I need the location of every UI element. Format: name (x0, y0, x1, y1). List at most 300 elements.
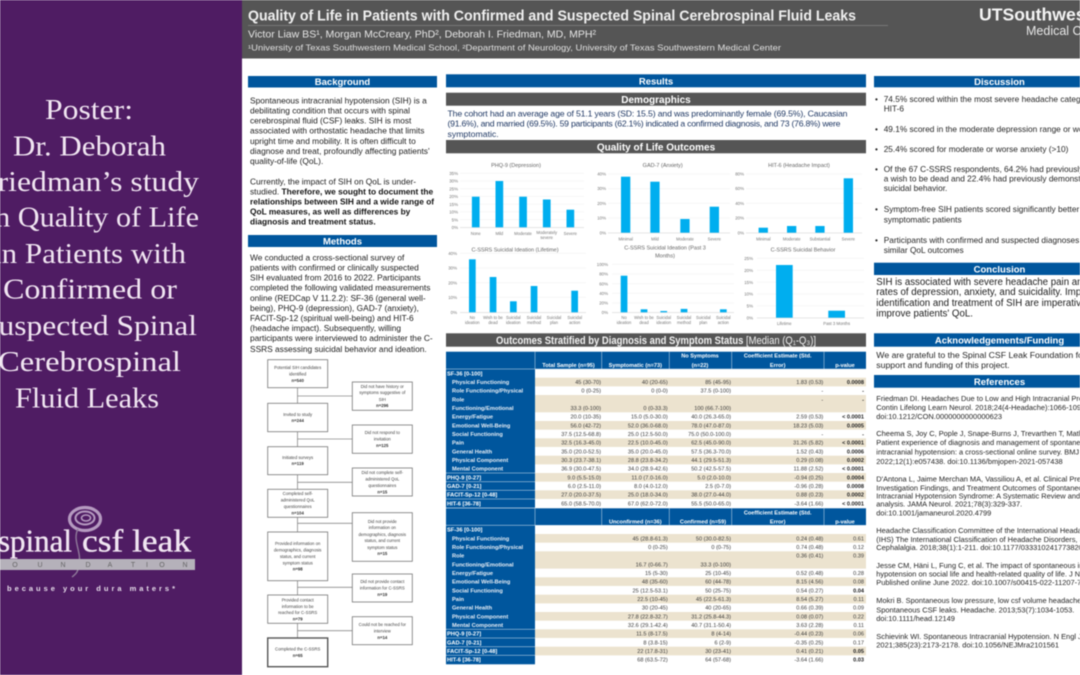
table: diagnosis status: 0.05 (853, 649, 864, 655)
table: symptom status: 0 (0-33.3) (643, 406, 668, 412)
flowchart: Invited to study (283, 412, 313, 417)
text: background paragraph (250, 96, 434, 226)
chart: PHQ-9 depression: 35% (449, 171, 458, 176)
chart: HIT-6 headache impact: 40% (735, 201, 744, 206)
table: symptom status: 31.26 (5.82) (793, 441, 823, 447)
table: diagnosis status: 6 (2-9) (715, 640, 731, 646)
logo: spinal csf leak foundation: spinal (0, 523, 72, 559)
logo: spinal csf leak foundation: I (146, 562, 148, 569)
text: acknowledgement (876, 350, 1080, 370)
panel: results heading: Results (639, 76, 673, 87)
authors: Victor Liaw BS¹, Morgan McCreary, PhD², Deborah I. Friedman, MD, MPH² (248, 30, 597, 40)
table: symptom status: 35.0 (20.0-52.5) (561, 449, 601, 455)
table: diagnosis status: 22.5 (10-45) (637, 597, 668, 603)
table: diagnosis status: PHQ-9 [0-27] (447, 632, 481, 638)
table: symptom status: GAD-7 [0-21] (447, 484, 482, 490)
table: diagnosis status: 11.5 (8-17.5) (636, 632, 668, 638)
text: discussion bullets: 25.4% scored for moderate or worse anxiety (>10) (884, 144, 1069, 154)
text: background paragraph: diagnose and treat, profoundly affecting patients' (250, 146, 430, 156)
chart: PHQ-9 depression: severe (540, 235, 554, 240)
panel: outcomes table heading: Outcomes Stratified by Diagnosis and Symptom Status [Median (Q₁-Q₃)] (496, 335, 816, 347)
chart: C-SSRS ideation past 3 months: 0% (602, 310, 608, 315)
flowchart: Provided information on (275, 541, 321, 546)
chart: C-SSRS ideation past 3 months: Suicidal (716, 315, 731, 320)
chart: C-SSRS ideation lifetime: C-SSRS Suicidal Ideation (Lifetime) (471, 248, 559, 254)
table: diagnosis status: Physical Functioning (452, 536, 510, 542)
text: methods paragraph: We conducted a cross-sectional survey of (250, 252, 405, 262)
logo: spinal csf leak foundation: O (159, 562, 165, 569)
text: reference list: 2021;385(23):2173-2178. doi:10.1056/NEJMra2101561 (876, 640, 1059, 650)
flowchart: symptoms suggestive of (359, 390, 406, 395)
panel: quality of life outcomes: Quality of Life Outcomes (597, 142, 716, 154)
chart: PHQ-9 depression: PHQ-9 (Depression) (491, 163, 541, 169)
header band (242, 0, 1080, 58)
panel: references: References (974, 377, 1025, 388)
logo: spinal csf leak foundation: N (60, 562, 66, 569)
flowchart: symptom status (367, 545, 397, 550)
table: diagnosis status: 0.03 (853, 658, 864, 664)
text: demographics paragraph: (91.6%), and married (69.5%). 59 participants (62.1%) indicated a confirmed diagnosis, and 73 (76.8%) were (448, 118, 841, 128)
table: diagnosis status: 15 (5-30) (645, 571, 668, 577)
table: symptom status: 57.5 (36.3-70.0) (691, 449, 731, 455)
table: diagnosis status: 0.28 (853, 571, 864, 577)
flowchart (268, 360, 412, 667)
table: symptom status: - (862, 432, 864, 438)
table: symptom status: 8.0 (4.0-12.0) (634, 484, 668, 490)
table: symptom status: 32.5 (16.3-45.0) (561, 441, 601, 447)
table: symptom status: 35.0 (20.0-45.0) (628, 449, 668, 455)
chart: C-SSRS suicidal behavior: 0% (747, 315, 753, 320)
table: symptom status: 0.0006 (847, 449, 864, 455)
table: diagnosis status: 0.52 (0.48) (796, 571, 823, 577)
icon: spiral (70, 508, 100, 577)
flowchart: administered QoL (281, 498, 315, 502)
table: symptom status: Physical Component (452, 458, 508, 464)
table: diagnosis status: -0.44 (0.23) (794, 632, 823, 638)
table: diagnosis status: 0.61 (853, 536, 864, 542)
chart: C-SSRS ideation lifetime: action (569, 320, 581, 325)
text: discussion bullets: • (875, 124, 878, 134)
table: symptom status: 38.0 (27.0-44.0) (691, 493, 731, 499)
table: symptom status: 0.0008 (847, 380, 864, 386)
text: reference list: doi:10.1111/head.12149 (876, 614, 955, 623)
table: diagnosis status: 0.39 (853, 554, 864, 560)
flowchart: n=98 (293, 566, 303, 572)
chart: C-SSRS suicidal behavior: Past 3 Months (823, 321, 850, 326)
table: diagnosis status: 0.04 (853, 588, 865, 594)
chart: GAD-7 anxiety: 40% (597, 172, 606, 177)
table: diagnosis status: 0.54 (0.27) (796, 588, 823, 594)
table: symptom status: 0.0005 (847, 423, 864, 429)
table: diagnosis status: Role (452, 554, 464, 560)
table: symptom status: 50.2 (42.5-57.5) (691, 467, 731, 473)
table: symptom status: 30.3 (23.7-38.1) (561, 458, 601, 464)
table: symptom status: Mental Component (452, 467, 503, 473)
flowchart: Did not complete self- (362, 470, 404, 475)
table: symptom status: 37.5 (0-100) (701, 389, 731, 395)
table: symptom status: 78.0 (47.0-87.0) (691, 423, 731, 429)
text: conclusion paragraph (876, 277, 1080, 320)
text: discussion bullets: symptomatic patients (884, 214, 962, 224)
table: diagnosis status: GAD-7 [0-21] (447, 640, 482, 646)
chart: C-SSRS ideation past 3 months: Months) (655, 254, 675, 260)
flowchart: n=65 (293, 653, 303, 658)
chart: PHQ-9 depression: 15% (449, 202, 458, 207)
flowchart: demographics, diagnosis (274, 548, 321, 552)
flowchart: n=15 (377, 551, 388, 556)
chart: C-SSRS ideation lifetime: 30% (448, 266, 457, 271)
table: diagnosis status: Social Functioning (452, 588, 503, 594)
panel: purple sidebar (0, 0, 242, 675)
text: methods paragraph: SSRS assessing suicidal behavior and ideation. (250, 344, 427, 354)
text: discussion bullets: HIT-6 (884, 104, 904, 114)
chart: C-SSRS suicidal behavior: C-SSRS Suicidal Behavior (771, 248, 836, 254)
heading: poster description: Fluid Leaks (15, 384, 159, 414)
chart: GAD-7 anxiety: 30% (597, 186, 606, 191)
text: methods paragraph: participants were interviewed to administer the C- (250, 333, 433, 343)
text: reference list: doi:10.1212/CON.0000000000000623 (876, 412, 1002, 421)
flowchart: n=19 (377, 592, 388, 597)
panel: results heading (446, 74, 866, 87)
chart: HIT-6 headache impact: 60% (735, 186, 744, 191)
table: diagnosis status: 0.66 (0.39) (796, 606, 823, 612)
text: reference list: Published online June 2022. doi:10.1007/s00415-022-11207-7 (876, 578, 1080, 587)
text: discussion bullets: • (875, 164, 878, 174)
chart: PHQ-9 depression: 30% (449, 179, 458, 184)
table: symptom status: 85 (45-95) (705, 380, 731, 386)
chart: HIT-6 headache impact: 20% (735, 215, 744, 220)
table: diagnosis status: 8.54 (5.27) (796, 597, 823, 603)
table: diagnosis status: 33.3 (0-100) (701, 562, 731, 568)
table: diagnosis status: 0.74 (0.48) (796, 545, 823, 551)
table: diagnosis status: General Health (452, 606, 493, 612)
table: symptom status: Coefficient Estimate (Std. (744, 354, 812, 360)
table: symptom status: Symptomatic (n=73) (609, 363, 662, 369)
flowchart: n=125 (376, 443, 389, 448)
table: diagnosis status: 45 (22.5-61.3) (696, 597, 731, 603)
table: diagnosis status: 27.8 (22.8-32.7) (628, 614, 668, 620)
chart: GAD-7 anxiety: 10% (597, 215, 606, 220)
table: symptom status: 40 (20-65) (642, 380, 668, 386)
table: diagnosis status: FACIT-Sp-12 [0-48] (447, 649, 497, 655)
chart: C-SSRS ideation past 3 months: 20% (599, 301, 608, 306)
text: demographics paragraph (448, 108, 848, 139)
table: diagnosis status: 0.24 (0.48) (796, 536, 823, 542)
text: acknowledgement: support and funding of this project. (876, 360, 1010, 370)
table: diagnosis status: 0.22 (853, 614, 864, 620)
table: symptom status: Pain (452, 441, 465, 447)
table: symptom status: 34.0 (28.9-42.6) (628, 467, 668, 473)
flowchart: demographics, diagnosis (359, 532, 406, 537)
heading: poster description (0, 95, 199, 414)
text: discussion bullets: suicidal behavior. (884, 183, 947, 193)
table: symptom status: 36.9 (30.0-47.5) (561, 467, 601, 473)
heading: poster description: Dr. Deborah (13, 132, 166, 162)
table: symptom status: 1.52 (0.43) (796, 449, 823, 455)
text: reference list: 2022;12(1):e057438. doi:10.1136/bmjopen-2021-057438 (876, 457, 1063, 466)
text: background paragraph: associated with orthostatic headache that limits (250, 126, 424, 136)
table: symptom status: Role Functioning/Physical (452, 389, 524, 395)
table: diagnosis status: 32.6 (29.1-42.4) (628, 623, 668, 629)
table: symptom status: < 0.0001 (842, 501, 864, 507)
chart: PHQ-9 depression: Mild (495, 231, 504, 236)
flowchart: Provided contact (282, 598, 315, 602)
table: diagnosis status: 0.17 (853, 640, 864, 646)
chart: PHQ-9 depression: 10% (449, 210, 458, 215)
chart: C-SSRS ideation past 3 months: action (718, 320, 730, 325)
flowchart: Did not provide contact (360, 579, 405, 584)
table: symptom status: 0 (0-25) (581, 389, 601, 395)
flowchart: n=79 (293, 616, 303, 622)
table: symptom status: 25.0 (12.5-50.0) (628, 432, 668, 438)
table: diagnosis status: -0.35 (0.25) (794, 640, 823, 646)
table: diagnosis status: SF-36 [0-100] (447, 528, 483, 534)
table: diagnosis status: 25 (12.5-53.1) (633, 588, 668, 594)
flowchart: information for C-SSRS (360, 586, 405, 590)
chart: C-SSRS suicidal behavior: 10% (744, 292, 753, 297)
table: symptom status: - (821, 397, 823, 403)
table: diagnosis status: 31.2 (25.8-44.3) (691, 614, 731, 620)
text: demographics paragraph: symptomatic. (448, 129, 499, 139)
flowchart: symptom status (283, 560, 313, 566)
chart: C-SSRS ideation lifetime: Suicidal (527, 315, 541, 320)
flowchart: n=119 (292, 461, 304, 466)
table: symptom status: 0.0008 (847, 484, 864, 490)
text: conclusion paragraph: improve patients' QoL. (876, 308, 973, 320)
table: symptom status: 67.0 (62.0-72.0) (628, 501, 668, 507)
flowchart: information on (369, 525, 397, 530)
chart: C-SSRS ideation past 3 months: C-SSRS Suicidal Ideation (Past 3 (624, 245, 706, 251)
table: diagnosis status: 0 (0-25) (648, 545, 668, 551)
flowchart: Initiated surveys (282, 455, 313, 460)
chart: C-SSRS ideation lifetime: Suicidal (547, 315, 561, 320)
text: demographics paragraph: The cohort had an average age of 51.1 years (SD: 15.5) and was predominantly female (69.5%), Caucasian (448, 108, 848, 118)
chart: C-SSRS ideation past 3 months (597, 245, 734, 325)
chart: GAD-7 anxiety: Moderate (676, 236, 695, 242)
text: reference list: analysis. JAMA Neurol. 2021;78(3):329-337. (876, 500, 1022, 508)
panel: references (874, 375, 1080, 650)
chart: HIT-6 headache impact: Substantial (810, 236, 830, 242)
chart: HIT-6 headache impact: 80% (735, 172, 744, 177)
text: background paragraph: quality-of-life (QoL). (250, 156, 323, 166)
flowchart: questionnaires (284, 504, 312, 509)
table: symptom status: -3.64 (1.66) (794, 501, 823, 507)
panel: acknowledgements: Acknowledgements/Funding (935, 336, 1064, 346)
flowchart: Completed self- (283, 491, 313, 496)
chart: C-SSRS ideation past 3 months: Wish to be (634, 315, 655, 320)
table: diagnosis status: Mental Component (452, 623, 503, 629)
table: diagnosis status: Functioning/Emotional (452, 562, 514, 568)
flowchart: n=15 (377, 490, 388, 494)
table: diagnosis status: 40.7 (31.1-50.4) (691, 623, 731, 629)
table: symptom status: - (821, 432, 823, 438)
text: methods paragraph: patients with confirmed or clinically suspected (250, 262, 419, 272)
chart: C-SSRS ideation lifetime: Suicidal (506, 315, 521, 320)
logo: spinal csf leak foundation: O (12, 562, 18, 569)
table: symptom status: Emotional Well-Being (452, 423, 511, 429)
flowchart: SIH (379, 397, 386, 402)
chart: C-SSRS suicidal behavior (744, 248, 864, 326)
chart: C-SSRS ideation lifetime: 0% (451, 310, 457, 315)
chart: C-SSRS suicidal behavior: Lifetime (777, 321, 792, 326)
chart: HIT-6 headache impact: HIT-6 (Headache Impact) (768, 163, 830, 169)
table: diagnosis status: 45 (28.8-61.3) (633, 536, 668, 542)
logo: spinal csf leak foundation: D (85, 562, 91, 569)
affiliations: ¹University of Texas Southwestern Medical School, ²Department of Neurology, University of Texas Southwestern Medical Center (248, 42, 781, 52)
chart: C-SSRS ideation past 3 months: 80% (599, 272, 608, 277)
table: symptom status: < 0.0001 (842, 467, 864, 473)
heading: poster description: Cerebrospinal (0, 347, 181, 378)
table: diagnosis status: Role Functioning/Physical (452, 545, 524, 551)
flowchart: Did not have history or (361, 384, 404, 389)
table: diagnosis status: 0.12 (853, 545, 864, 551)
table: diagnosis status: 0.41 (0.21) (796, 649, 823, 655)
table: symptom status: - (862, 397, 864, 403)
table: symptom status: 0.0002 (847, 458, 864, 464)
table: symptom status: 20.0 (10-35) (571, 415, 601, 421)
table: symptom status: FACIT-Sp-12 [0-48] (447, 493, 497, 499)
table: symptom status: 6.0 (2.5-11.0) (568, 484, 601, 490)
chart: PHQ-9 depression (449, 163, 584, 240)
text: reference list: doi:10.1001/jamaneurol.2020.4799 (876, 508, 991, 518)
table: diagnosis status: p-value (835, 520, 855, 526)
flowchart: administered QoL (365, 476, 400, 482)
table: diagnosis status: Confirmed (n=59) (680, 520, 726, 526)
text: background paragraph: diagnosis and treatment status. (250, 216, 376, 226)
table: symptom status: 100 (66.7-100) (694, 406, 731, 412)
table: symptom status: 0.88 (0.23) (796, 493, 823, 499)
table: diagnosis status: 8 (4-14) (711, 632, 731, 638)
table: symptom status: - (821, 389, 823, 395)
chart: C-SSRS ideation lifetime: 40% (448, 251, 457, 256)
chart: GAD-7 anxiety: Minimal (618, 236, 633, 242)
table: symptom status: 44.1 (29.5-51.3) (691, 458, 731, 464)
chart: PHQ-9 depression: Severe (564, 231, 578, 236)
text: reference list: Spontaneous CSF leaks. Headache. 2013;53(7):1034-1053. (876, 606, 1074, 614)
chart: PHQ-9 depression: 0% (452, 225, 458, 230)
chart: GAD-7 anxiety: 0% (600, 230, 606, 235)
text: background paragraph: debilitating condition that occurs with spinal (250, 106, 410, 116)
chart: C-SSRS ideation past 3 months: dead (639, 320, 649, 325)
chart: GAD-7 anxiety: 20% (597, 201, 606, 206)
flowchart: n=14 (377, 635, 388, 640)
flowchart: n=540 (292, 378, 304, 383)
table: symptom status: 75.0 (50.0-100.0) (688, 432, 731, 438)
chart: HIT-6 headache impact (735, 163, 862, 242)
chart: PHQ-9 depression: 25% (449, 186, 458, 191)
table: symptom status: Functioning/Emotional (452, 406, 514, 412)
title: Quality of Life in Patients with Confirmed and Suspected Spinal Cerebrospinal Fluid Leaks (248, 8, 856, 24)
panel: methods: Methods (323, 236, 362, 248)
table: symptom status: 9.0 (5.5-15.0) (567, 475, 601, 481)
table: symptom status: 37.5 (12.5-68.8) (561, 432, 601, 438)
table: diagnosis status: HIT-6 [36-78] (447, 658, 481, 664)
table: diagnosis status: 30 (23-41) (705, 649, 731, 655)
table: diagnosis status: Emotional Well-Being (452, 580, 511, 586)
table: diagnosis status: 50 (25-75) (705, 588, 731, 594)
table: symptom status: 22.5 (10.0-45.0) (628, 441, 668, 447)
table: symptom status: 56.0 (42-72) (571, 423, 601, 429)
table: symptom status: p-value (835, 363, 855, 369)
table: diagnosis status: 25 (10-45) (705, 571, 731, 577)
chart: C-SSRS ideation lifetime: dead (488, 320, 498, 325)
panel: conclusion: Conclusion (974, 264, 1026, 276)
chart: C-SSRS ideation past 3 months: method (677, 320, 692, 325)
flowchart: information to be (282, 604, 314, 609)
table: diagnosis status: 8.15 (4.56) (796, 580, 823, 586)
chart: C-SSRS ideation lifetime: method (527, 320, 542, 325)
table: symptom status: 52.0 (36.0-68.0) (628, 423, 668, 429)
text: discussion bullets: • (875, 204, 878, 214)
table: symptom status: < 0.0001 (842, 415, 864, 421)
table: symptom status: 11.88 (2.52) (794, 467, 823, 473)
logo: spinal csf leak foundation: N (182, 562, 188, 569)
table: diagnosis status: 0.08 (0.07) (796, 614, 823, 620)
table: symptom status: Total Sample (n=95) (542, 363, 595, 369)
table: symptom status: 1.83 (0.53) (796, 380, 823, 386)
table: symptom status: 15.0 (5.0-30.0) (631, 415, 668, 421)
chart: C-SSRS suicidal behavior: 20% (744, 268, 753, 273)
table: symptom status: 5.0 (2.0-10.0) (697, 475, 731, 481)
panel: discussion: Discussion (974, 77, 1025, 88)
text: methods paragraph: (headache impact). Subsequently, willing (250, 323, 401, 333)
table: symptom status: - (862, 389, 864, 395)
table: diagnosis status: 48 (35-60) (642, 580, 668, 586)
logo: spinal csf leak foundation: A (108, 562, 113, 569)
chart: C-SSRS ideation lifetime: plan (550, 320, 559, 325)
table: diagnosis status (446, 508, 866, 664)
table: diagnosis status: 0.09 (853, 606, 864, 612)
table: symptom status (446, 352, 866, 508)
table: symptom status: 33.3 (0-100) (571, 406, 601, 412)
flowchart: invitation (374, 436, 391, 442)
table: symptom status: Role (452, 397, 464, 403)
flowchart: interview (374, 628, 392, 634)
chart: C-SSRS ideation lifetime: 10% (448, 295, 457, 300)
table: symptom status: 45 (30-70) (575, 380, 601, 386)
text: methods paragraph: completed the following validated measurements (250, 282, 430, 292)
table: diagnosis status: Energy/Fatigue (452, 571, 493, 577)
table: symptom status: 2.59 (0.53) (796, 415, 823, 421)
table: symptom status: No Symptoms (681, 354, 719, 360)
chart: C-SSRS ideation lifetime: Wish to be (483, 315, 504, 320)
heading: poster description: Confirmed or (3, 274, 178, 306)
table: symptom status: Social Functioning (452, 432, 503, 438)
chart: C-SSRS suicidal behavior: 15% (744, 280, 753, 285)
table: symptom status: HIT-6 [36-78] (447, 501, 481, 507)
table: diagnosis status: Unconfirmed (n=36) (609, 520, 662, 526)
flowchart: Completed the C-SSRS (275, 646, 321, 652)
flowchart: Did not respond to (365, 430, 400, 435)
table: symptom status: 62.5 (45.0-90.0) (691, 441, 731, 447)
panel: outcomes table heading (446, 333, 866, 347)
text: discussion bullets: • (875, 94, 878, 104)
chart: HIT-6 headache impact: Minimal (756, 236, 771, 242)
table: symptom status: 0.0002 (847, 493, 864, 499)
table: diagnosis status: 3.63 (2.28) (796, 623, 823, 629)
table: symptom status: 2.5 (0-7.0) (705, 484, 731, 490)
table: diagnosis status: 0 (0-75) (711, 545, 731, 551)
table: diagnosis status: Physical Component (452, 614, 508, 620)
flowchart: n=296 (376, 403, 389, 408)
chart: C-SSRS ideation past 3 months: No (621, 315, 627, 320)
table: symptom status: 0 (0-0) (651, 389, 668, 395)
chart: HIT-6 headache impact: Moderate (783, 236, 801, 242)
table: diagnosis status: 0.08 (853, 580, 864, 586)
panel: background (248, 76, 437, 226)
text: methods paragraph: being), PHQ-9 (depression), GAD-7 (anxiety), (250, 303, 419, 313)
table: symptom status: (n=22) (692, 363, 708, 369)
